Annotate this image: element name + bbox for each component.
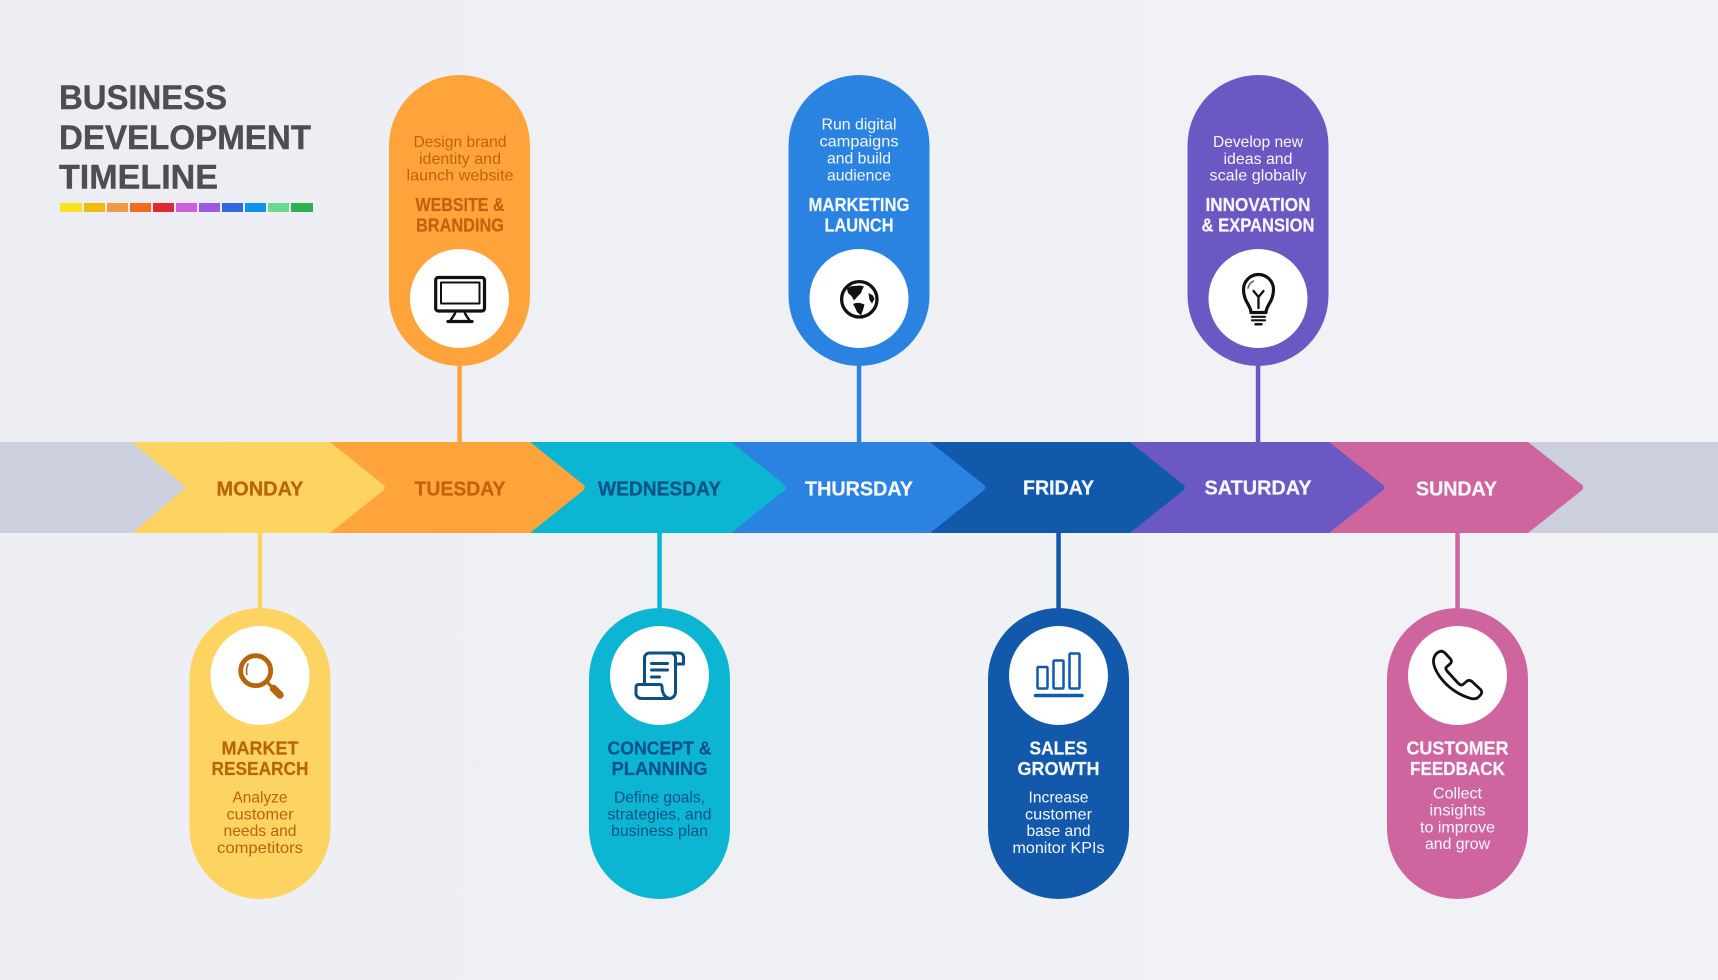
panel: market research: RESEARCH <box>212 759 308 779</box>
icon: magnifying glass <box>241 656 280 695</box>
panel: marketing launch: campaigns <box>820 134 898 150</box>
panel: market research: needs and <box>224 823 296 840</box>
panel: sales growth: customer <box>1025 806 1093 824</box>
panel: website and branding: launch website <box>406 168 514 184</box>
panel: sales growth: Increase <box>1028 790 1089 806</box>
panel: sales growth: monitor KPIs <box>1012 840 1104 857</box>
day labels: THURSDAY <box>805 478 913 500</box>
icon: bar chart <box>1036 654 1082 696</box>
chevron: Monday <box>132 442 385 533</box>
panel: sales growth: GROWTH <box>1018 759 1100 779</box>
icon: light bulb <box>1244 275 1274 324</box>
title: BUSINESS <box>59 79 227 117</box>
panel: customer feedback: to improve <box>1420 819 1495 836</box>
chevron arrow timeline <box>132 442 1583 533</box>
panel: customer feedback: insights <box>1430 802 1486 819</box>
panel: website and branding: WEBSITE & <box>416 195 504 215</box>
chevron: Saturday <box>1130 442 1384 533</box>
colour swatch strip <box>60 203 313 212</box>
panel: customer feedback: CUSTOMER <box>1406 738 1508 758</box>
panel: sales growth: base and <box>1026 823 1090 840</box>
panel: market research <box>190 533 330 899</box>
chevron: Wednesday <box>530 442 786 533</box>
panel: concept and planning: PLANNING <box>612 759 708 779</box>
panel: website and branding: BRANDING <box>416 215 504 235</box>
panel: marketing launch: MARKETING <box>808 195 910 215</box>
day labels: WEDNESDAY <box>598 478 721 500</box>
panel: customer feedback: and grow <box>1425 836 1490 853</box>
panel: marketing launch: LAUNCH <box>824 215 894 235</box>
timeline background band <box>0 442 1718 533</box>
panel: marketing launch: audience <box>827 168 891 184</box>
panel: customer feedback <box>1387 533 1528 899</box>
panel: website and branding: identity and <box>419 151 501 168</box>
panel: website and branding: Design brand <box>414 134 506 151</box>
panel: innovation and expansion: scale globally <box>1210 168 1306 184</box>
panel: innovation and expansion: ideas and <box>1224 151 1292 168</box>
day labels: FRIDAY <box>1023 476 1094 500</box>
panel: innovation and expansion: & EXPANSION <box>1202 215 1314 235</box>
panel: sales growth <box>988 533 1129 899</box>
panel: market research: MARKET <box>222 738 298 758</box>
panel: concept and planning: business plan <box>611 823 708 840</box>
icon: desktop monitor <box>436 278 484 322</box>
chevron: Tuesday <box>330 442 585 533</box>
day labels <box>216 476 1497 500</box>
panel: innovation and expansion <box>1188 75 1328 442</box>
icon: telephone handset <box>1433 651 1482 699</box>
chevron: Sunday <box>1320 442 1583 533</box>
day labels: MONDAY <box>216 478 304 500</box>
panel: market research: Analyze <box>232 790 288 806</box>
panel: marketing launch <box>788 75 930 442</box>
day labels: SUNDAY <box>1416 478 1497 500</box>
panel: customer feedback: FEEDBACK <box>1410 759 1505 779</box>
day labels: TUESDAY <box>414 478 506 500</box>
day labels: SATURDAY <box>1204 476 1312 500</box>
icon: paper scroll <box>636 653 684 699</box>
panel: concept and planning: strategies, and <box>608 806 712 824</box>
panel: innovation and expansion: Develop new <box>1213 134 1303 151</box>
panel: customer feedback: Collect <box>1433 785 1483 802</box>
chevron: Friday <box>930 442 1185 533</box>
chevron: Thursday <box>731 442 985 533</box>
panel: sales growth: SALES <box>1030 738 1088 758</box>
icon: globe <box>842 282 877 317</box>
panel: website and branding <box>389 75 530 442</box>
panel: concept and planning <box>589 533 730 899</box>
panel: market research: customer <box>226 806 294 824</box>
title: DEVELOPMENT <box>59 119 311 157</box>
panel: marketing launch: Run digital <box>822 116 896 134</box>
panel: concept and planning: Define goals, <box>614 790 705 806</box>
panel: marketing launch: and build <box>827 150 891 168</box>
panel: concept and planning: CONCEPT & <box>608 738 712 758</box>
panel: innovation and expansion: INNOVATION <box>1206 195 1310 215</box>
title <box>59 79 311 196</box>
panel: market research: competitors <box>217 840 303 857</box>
title: TIMELINE <box>59 158 218 196</box>
